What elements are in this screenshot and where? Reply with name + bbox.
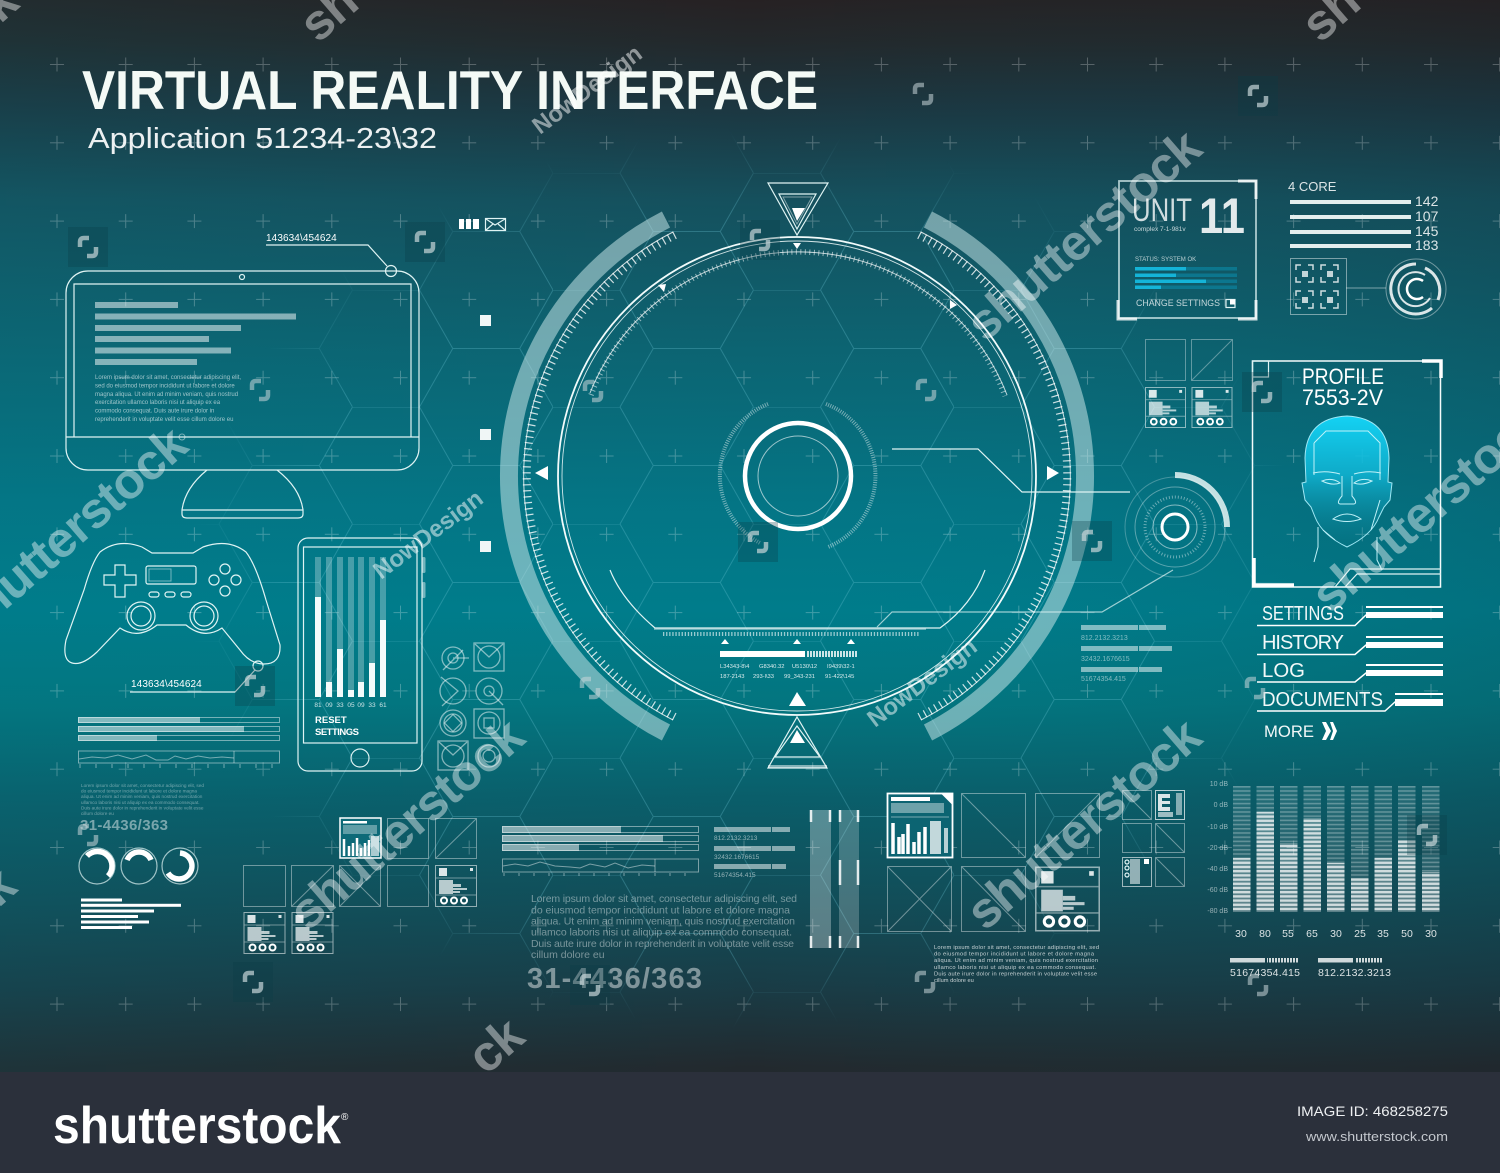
chart value labels: 65 bbox=[1306, 928, 1318, 940]
donut gauges bbox=[79, 848, 198, 884]
monitor stand bbox=[182, 470, 303, 518]
white bar list bbox=[81, 898, 181, 929]
readout bar: I9439\32-1 bbox=[827, 664, 855, 670]
chart value labels: 25 bbox=[1354, 928, 1366, 940]
right small lorem text: cillum dolore eu bbox=[934, 978, 974, 984]
more link bbox=[1264, 722, 1337, 741]
chart value labels: 80 bbox=[1259, 928, 1271, 940]
icon: battery and envelope bbox=[459, 218, 506, 230]
chart value labels: 30 bbox=[1330, 928, 1342, 940]
chart value labels: 30 bbox=[1425, 928, 1437, 940]
chart footer labels bbox=[1230, 958, 1391, 979]
center HUD bbox=[509, 183, 1173, 768]
chart upper stripes bbox=[1233, 786, 1440, 878]
profile heading bbox=[1302, 364, 1384, 410]
watermark: shutterstock logotypes: shutterstock bbox=[955, 118, 1212, 351]
panel: 4 core: 4 CORE bbox=[1288, 179, 1337, 194]
watermark: shutterstock logotypes: shutterstock bbox=[955, 707, 1212, 940]
readout bar: G8340.32 bbox=[759, 664, 784, 670]
panel: unit 11 bbox=[1118, 181, 1256, 319]
small lorem text left: cillum dolore eu bbox=[81, 811, 114, 816]
menu: documents: DOCUMENTS bbox=[1262, 689, 1383, 711]
empty thumbnails bbox=[244, 818, 476, 906]
panel: 4 core bbox=[1288, 179, 1446, 319]
side squares bbox=[480, 315, 491, 552]
core values: 145 bbox=[1415, 223, 1439, 239]
bottom center lorem text: ullamco laboris nisi ut aliquip ex ea commodo consequat. bbox=[531, 926, 792, 938]
unit heading: UNIT bbox=[1132, 192, 1192, 228]
watermark: shutterstock logotypes: shutterstock bbox=[278, 707, 535, 940]
right mini data labels: 32432.1676615 bbox=[1081, 656, 1130, 663]
right small lorem text: aliqua. Ut enim ad minim veniam, quis nostrud exercitation bbox=[934, 958, 1098, 964]
chart axis labels: -20 dB bbox=[1207, 845, 1228, 852]
vertical strips bbox=[810, 810, 859, 948]
right small lorem text: do eiusmod tempor incididunt ut labore et dolore magna bbox=[934, 952, 1095, 958]
readout bar: 99_343-231 bbox=[784, 674, 815, 680]
bottom center lorem text: cillum dolore eu bbox=[531, 949, 605, 961]
footer image id: IMAGE ID: 468258275 bbox=[1297, 1103, 1448, 1119]
small code labels: 812.2132.3213 bbox=[714, 835, 758, 842]
phone bar chart: 61 bbox=[379, 702, 387, 709]
menu: log bbox=[1257, 660, 1443, 682]
chart axis labels: -40 dB bbox=[1207, 866, 1228, 873]
small thumbnail grid right bbox=[1122, 790, 1184, 886]
chart axis labels: -60 dB bbox=[1207, 887, 1228, 894]
watermark: camera-mark squares bbox=[68, 76, 1447, 1005]
unit heading: 11 bbox=[1199, 188, 1245, 244]
small lorem text left: do eiusmod tempor incididunt ut labore et dolore magna bbox=[81, 789, 197, 794]
small lorem text left: Duis aute irure dolor in reprehenderit in voluptate velit esse bbox=[81, 805, 204, 810]
chart document thumbnail bbox=[888, 794, 952, 858]
right mini data labels: 812.2132.3213 bbox=[1081, 635, 1128, 642]
bottom triangle marker bbox=[768, 692, 827, 768]
bottom center lorem text: do eiusmod tempor incididunt ut labore et dolore magna bbox=[531, 904, 790, 916]
right mini data labels: 51674354.415 bbox=[1081, 676, 1126, 683]
chart value labels bbox=[1235, 928, 1437, 940]
title: VIRTUAL REALITY INTERFACE bbox=[82, 59, 818, 121]
chart axis labels: -10 dB bbox=[1207, 824, 1228, 831]
footer bar bbox=[0, 1072, 1500, 1173]
tick scale bbox=[654, 628, 926, 644]
outer thick arcs bbox=[509, 220, 1085, 732]
right small lorem text: ullamco laboris nisi ut aliquip ex ea commodo consequat. bbox=[934, 965, 1096, 971]
right small lorem text: Lorem ipsum dolor sit amet, consectetur adipiscing elit, sed bbox=[934, 945, 1099, 951]
chart value labels: 55 bbox=[1282, 928, 1294, 940]
reset settings label: RESET bbox=[315, 715, 347, 726]
gamepad callout: 143634\454624 bbox=[131, 679, 202, 690]
subtitle: Application 51234-23\32 bbox=[88, 123, 437, 155]
profile frame bbox=[1252, 361, 1441, 587]
focus grid icon bbox=[1290, 258, 1346, 314]
readout bar: 187-2143 bbox=[720, 674, 744, 680]
menu: log: LOG bbox=[1262, 660, 1305, 682]
left data bars bbox=[78, 717, 280, 768]
bottom-left thumbnail grid bbox=[244, 818, 476, 954]
small code labels bbox=[714, 827, 795, 879]
monitor lorem text: Lorem ipsum dolor sit amet, consectetur adipiscing elit, bbox=[95, 375, 241, 381]
unit status bars: STATUS: SYSTEM OK bbox=[1135, 257, 1196, 263]
icon column bbox=[438, 643, 504, 770]
chart value labels: 50 bbox=[1401, 928, 1413, 940]
change settings label: CHANGE SETTINGS bbox=[1136, 298, 1220, 309]
chart value labels: 30 bbox=[1235, 928, 1247, 940]
smartphone bbox=[298, 538, 426, 771]
bottom center lorem text bbox=[531, 893, 797, 961]
core values bbox=[1415, 193, 1439, 253]
monitor lorem text bbox=[95, 375, 241, 423]
menu: history: HISTORY bbox=[1262, 632, 1344, 654]
footer url: www.shutterstock.com bbox=[1305, 1129, 1448, 1144]
gamepad callout bbox=[130, 661, 263, 692]
monitor body bbox=[66, 271, 419, 470]
readout bar: 91-422\145 bbox=[825, 674, 854, 680]
more link: MORE bbox=[1264, 722, 1314, 741]
connector lines bbox=[610, 449, 1173, 628]
gamepad outline bbox=[65, 543, 280, 664]
right mini data labels bbox=[1081, 625, 1172, 683]
phone bar chart: 33 bbox=[368, 702, 376, 709]
monitor lorem text: sed do eiusmod tempor incididunt ut labore et dolore bbox=[95, 383, 235, 389]
core values: 142 bbox=[1415, 193, 1439, 209]
right small lorem text bbox=[934, 945, 1099, 984]
small code labels: 51674354.415 bbox=[714, 872, 756, 879]
head illustration bbox=[1302, 416, 1392, 570]
progress bars bbox=[502, 826, 698, 851]
small code labels: 32432.1676615 bbox=[714, 854, 760, 861]
watermark: NowDesign bbox=[368, 40, 982, 733]
large data card bbox=[1036, 867, 1099, 931]
right small lorem text: Duis aute irure dolor in reprehenderit in voluptate velit esse bbox=[934, 971, 1097, 977]
bottom center data bars bbox=[502, 826, 795, 879]
menu: settings bbox=[1257, 603, 1443, 626]
center-right thumbnails bbox=[888, 794, 1100, 932]
menu: settings: SETTINGS bbox=[1262, 603, 1344, 625]
unit heading bbox=[1132, 188, 1245, 244]
monitor panel bbox=[66, 233, 419, 518]
outer tick rings bbox=[524, 232, 1070, 720]
dial pointers bbox=[535, 243, 1059, 480]
chart axis labels bbox=[1207, 781, 1228, 915]
phone bar chart: 05 bbox=[347, 702, 355, 709]
small lorem text left: Lorem ipsum dolor sit amet, consectetur adipiscing elit, sed bbox=[81, 783, 204, 788]
chart lower stripes bbox=[1233, 812, 1440, 912]
empty thumbnails bbox=[888, 794, 1100, 932]
panel: profile bbox=[1252, 361, 1443, 741]
watermark: NowDesign: NowDesign bbox=[527, 40, 647, 140]
monitor callout: 143634\454624 bbox=[266, 233, 337, 244]
phone bar chart: 09 bbox=[357, 702, 365, 709]
chart value labels: 35 bbox=[1377, 928, 1389, 940]
inner tick arc bbox=[590, 252, 1007, 396]
reset settings label: SETTINGS bbox=[315, 727, 359, 738]
monitor bars bbox=[95, 302, 296, 365]
chart axis labels: -80 dB bbox=[1207, 908, 1228, 915]
phone body bbox=[298, 538, 426, 771]
profile menu bbox=[1257, 603, 1443, 741]
core values: 183 bbox=[1415, 237, 1439, 253]
bottom center lorem text: Lorem ipsum dolor sit amet, consectetur adipiscing elit, sed bbox=[531, 893, 797, 905]
readout bar: 293-l\33 bbox=[753, 674, 774, 680]
small lorem text left: ullamco laboris nisi ut aliquip ex ea commodo consequat. bbox=[81, 800, 200, 805]
chart footer labels: 51674354.415 bbox=[1230, 967, 1300, 979]
monitor lorem text: exercitation ullamco laboris nisi ut aliquip ex ea bbox=[95, 400, 221, 406]
menu: history bbox=[1257, 632, 1443, 654]
main dial circles bbox=[558, 237, 1036, 715]
gamepad bbox=[65, 543, 280, 692]
waveform chart bbox=[78, 751, 280, 768]
small lorem text left: aliqua. Ut enim ad minim veniam, quis nostrud exercitation bbox=[81, 794, 203, 799]
progress bars bbox=[78, 717, 280, 741]
footer logo: ® bbox=[341, 1112, 349, 1123]
gamepad controls bbox=[104, 564, 241, 630]
unit frame bbox=[1118, 181, 1256, 319]
bottom center code number: 31-4436/363 bbox=[527, 963, 702, 995]
phone bar chart bbox=[314, 557, 387, 709]
monitor lorem text: commodo consequat. Duis aute irure dolor in bbox=[95, 409, 214, 415]
phone bar chart: 09 bbox=[325, 702, 333, 709]
unit heading: complex 7-1-981v bbox=[1134, 226, 1186, 233]
data cards bbox=[244, 866, 476, 954]
bottom center lorem text: Duis aute irure dolor in reprehenderit in voluptate velit esse bbox=[531, 938, 794, 950]
monitor callout bbox=[266, 233, 396, 276]
readout bar: U5130\12 bbox=[792, 664, 817, 670]
readout bar bbox=[720, 651, 857, 680]
watermark: shutterstock logotypes: ck bbox=[456, 1006, 535, 1084]
phone bar chart: 81 bbox=[314, 702, 322, 709]
reset settings label bbox=[315, 715, 359, 738]
thumbnails above profile bbox=[1145, 340, 1232, 428]
chart document thumbnail bbox=[340, 818, 381, 858]
phone bar chart: 33 bbox=[336, 702, 344, 709]
menu: documents bbox=[1257, 689, 1443, 711]
waveform chart bbox=[502, 859, 698, 876]
concentric c icon bbox=[1346, 259, 1446, 319]
monitor lorem text: reprehenderit in voluptate velit esse cillum dolore eu bbox=[95, 417, 233, 423]
profile heading: PROFILE bbox=[1302, 364, 1384, 389]
small lorem text left bbox=[81, 783, 204, 816]
chart axis labels: 0 dB bbox=[1214, 802, 1228, 809]
top triangle marker bbox=[768, 183, 828, 235]
core values: 107 bbox=[1415, 208, 1439, 224]
background hexagon mesh bbox=[218, 148, 1276, 1014]
watermark: NowDesign: NowDesign bbox=[368, 485, 488, 585]
readout bar: L34343-8\4 bbox=[720, 664, 750, 670]
footer logo: shutterstock bbox=[53, 1097, 341, 1155]
core bars bbox=[1290, 200, 1411, 248]
left code number: 31-4436/363 bbox=[80, 817, 168, 834]
watermark: NowDesign: NowDesign bbox=[862, 633, 982, 733]
bottom center lorem text: aliqua. Ut enim ad minim veniam, quis nostrud exercitation bbox=[531, 916, 795, 928]
chart axis labels: 10 dB bbox=[1210, 781, 1228, 788]
db bar chart bbox=[1207, 781, 1440, 979]
chart footer labels: 812.2132.3213 bbox=[1318, 967, 1391, 979]
center reticle bbox=[720, 404, 875, 547]
right target gauge bbox=[1125, 475, 1227, 577]
monitor lorem text: magna aliqua. Ut enim ad minim veniam, quis nostrud bbox=[95, 392, 238, 398]
profile heading: 7553-2V bbox=[1302, 385, 1383, 410]
